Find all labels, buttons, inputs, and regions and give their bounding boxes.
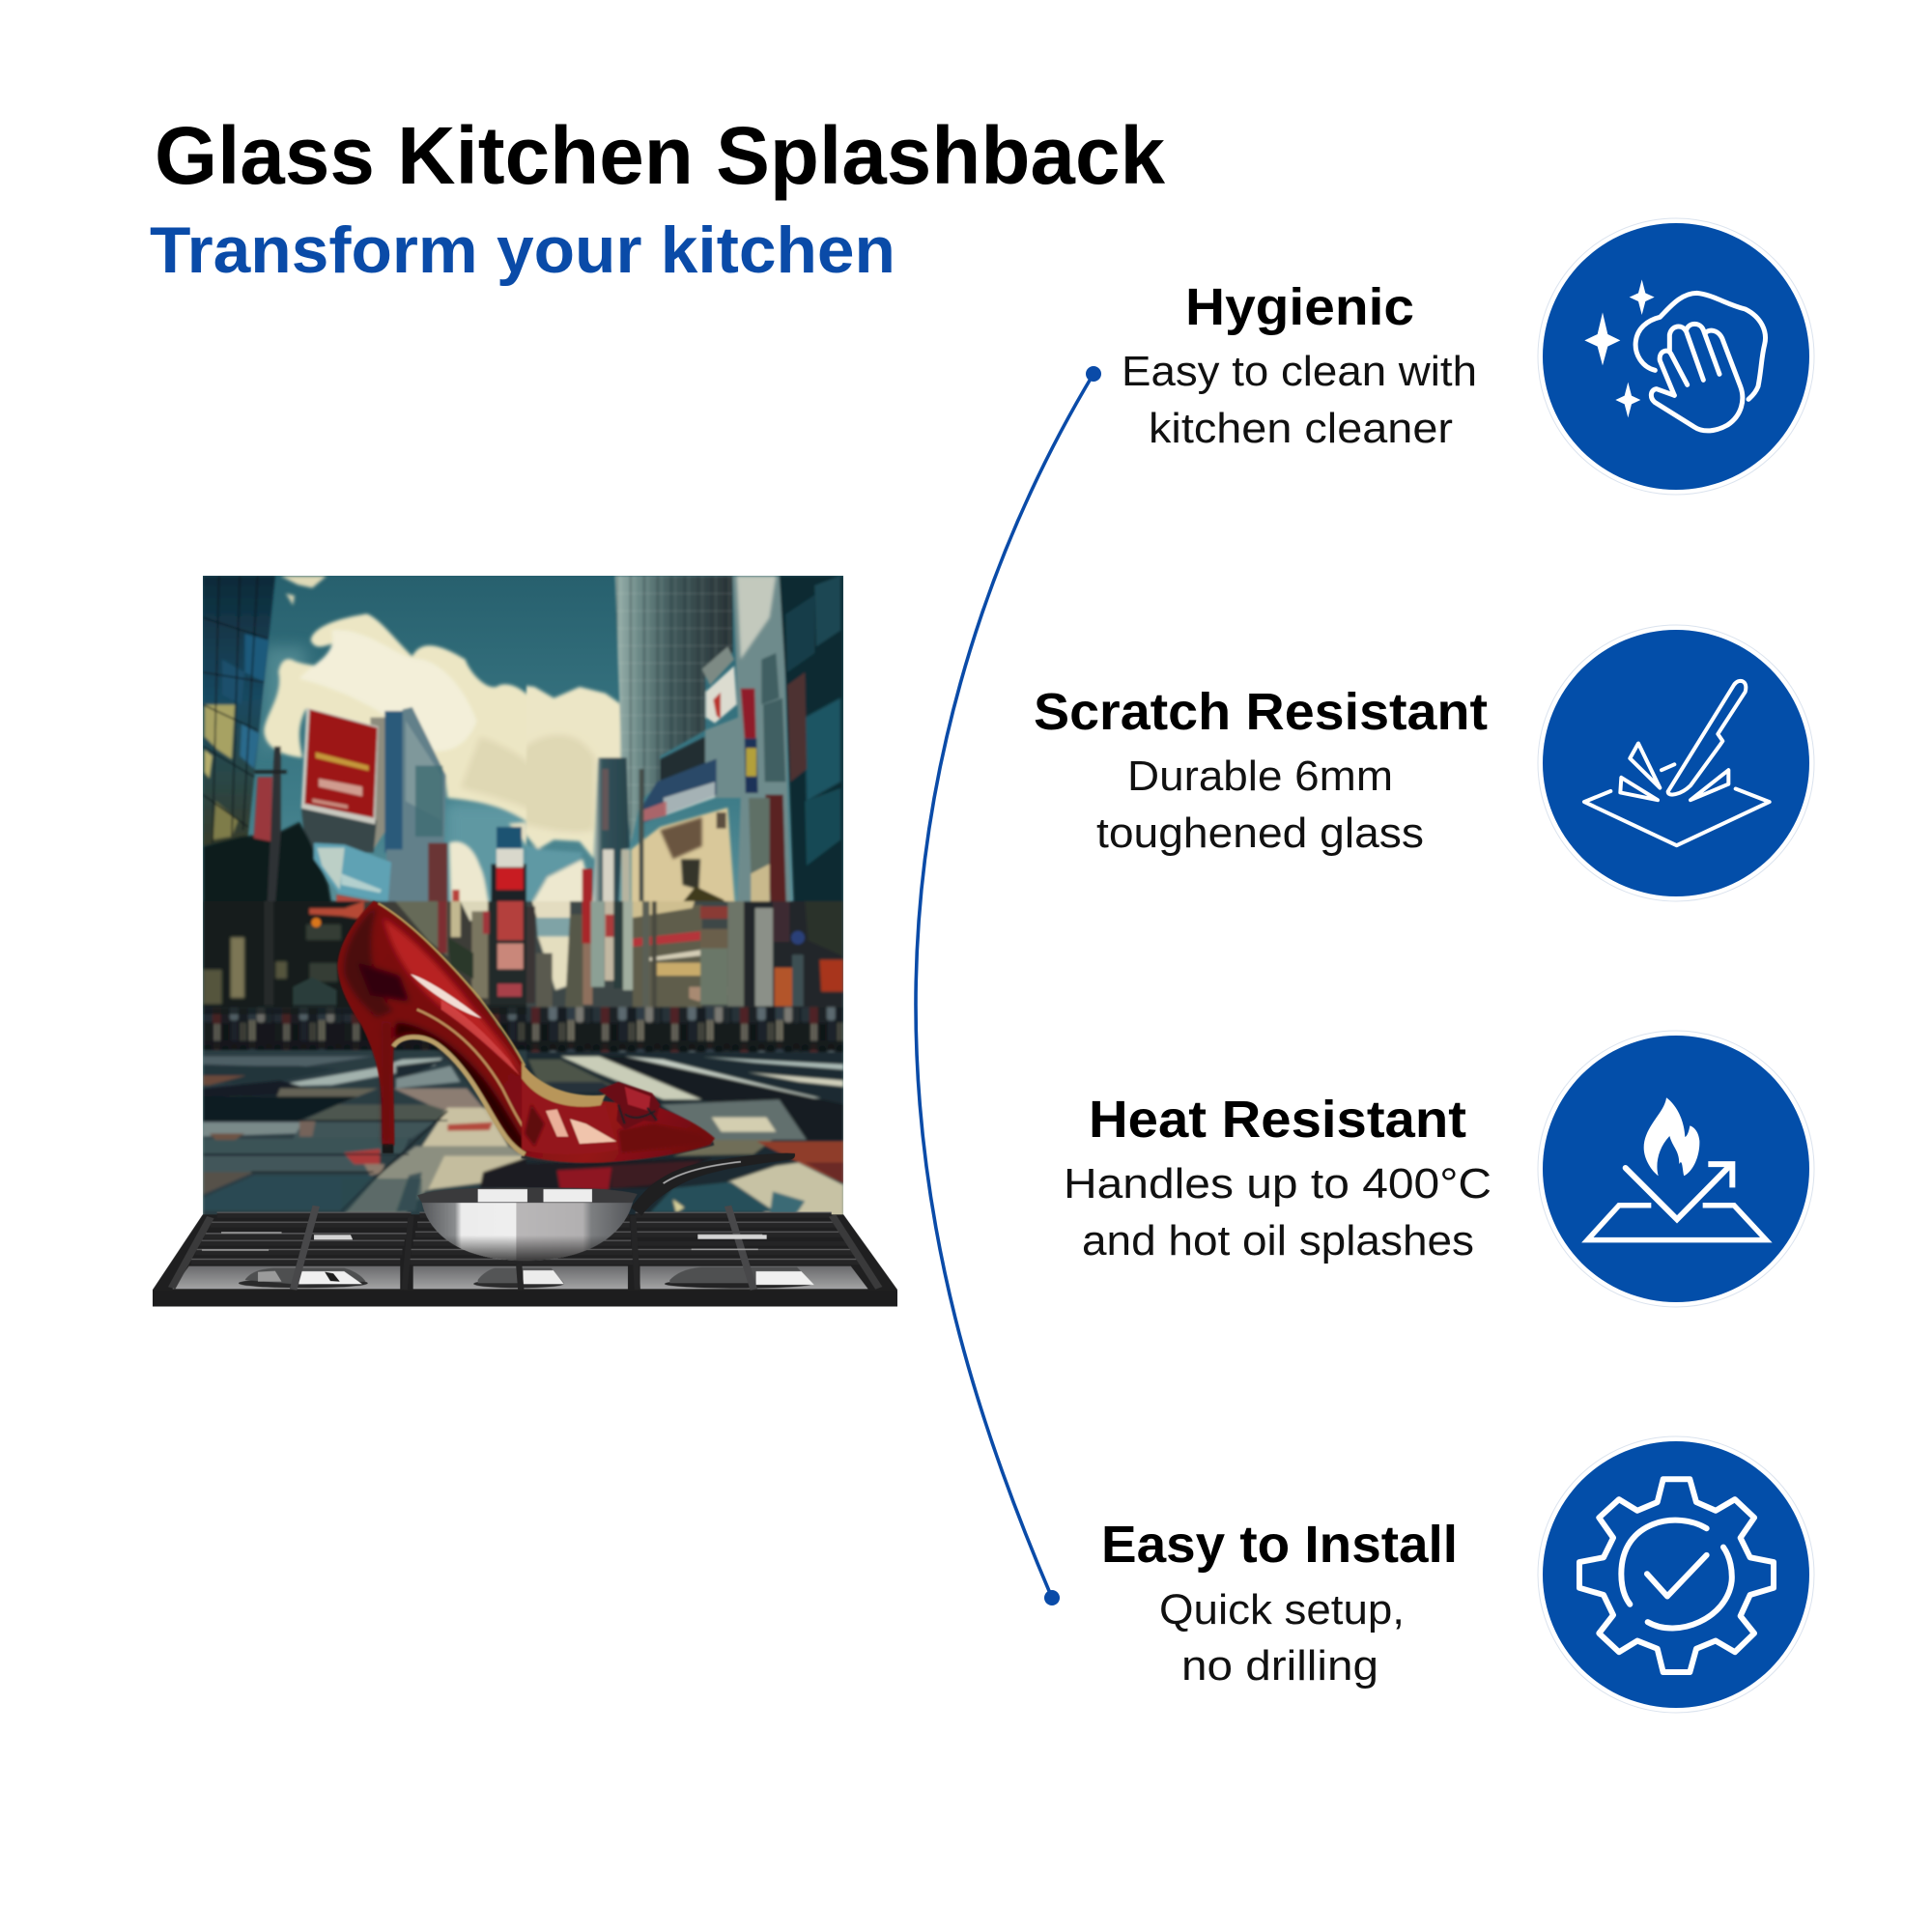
middle building xyxy=(593,757,630,904)
shoe gold lining xyxy=(379,903,525,1065)
pan handle xyxy=(631,1153,795,1215)
feature: Scratch Resistant: toughened glass xyxy=(1096,810,1424,857)
pan rim xyxy=(417,1187,638,1203)
glass tower xyxy=(615,576,732,843)
feature: Easy to Install xyxy=(1101,1516,1458,1690)
vertical signs xyxy=(741,689,756,738)
center billboards xyxy=(491,864,531,904)
light side building xyxy=(705,576,790,904)
icon: hand wiping with sparkles xyxy=(1538,218,1814,495)
shoe insole xyxy=(522,1063,606,1110)
billboard building xyxy=(370,718,388,849)
street pole and sign xyxy=(268,747,281,904)
front edge xyxy=(153,1292,897,1307)
pan body xyxy=(421,1197,634,1261)
feature: Heat Resistant: and hot oil splashes xyxy=(1082,1217,1474,1264)
burners xyxy=(239,1267,814,1289)
photo: upper-left quadrant, clouds, billboard, glass building xyxy=(203,576,531,904)
photo layers xyxy=(203,576,850,1231)
infographic canvas xyxy=(151,124,1814,1714)
hob trays xyxy=(173,1266,868,1289)
feature: Heat Resistant: Heat Resistant xyxy=(1089,1091,1466,1149)
photo: lower-right quadrant, shops, crowd and crossing xyxy=(522,898,850,1226)
shoe bow xyxy=(598,1082,660,1129)
pavement and crossing xyxy=(203,1050,531,1231)
shoe reflections and highlights xyxy=(344,903,529,1154)
feature: Scratch Resistant: Durable 6mm xyxy=(1127,753,1393,800)
connector bottom dot xyxy=(1044,1590,1060,1605)
icon: flame with deflecting arrow xyxy=(1538,1031,1814,1307)
large cream poster xyxy=(631,808,735,904)
red painted crossing xyxy=(756,1142,843,1183)
feature: Easy to Install: Quick setup, xyxy=(1159,1586,1405,1634)
street vista xyxy=(531,898,570,921)
feature: Scratch Resistant xyxy=(1034,683,1488,857)
feature: Scratch Resistant: Scratch Resistant xyxy=(1034,683,1488,741)
feature: Easy to Install: no drilling xyxy=(1181,1642,1378,1690)
feature: Hygienic: Easy to clean with xyxy=(1122,348,1477,395)
feature: Hygienic: Hygienic xyxy=(1185,278,1414,336)
feature: Heat Resistant: Handles up to 400°C xyxy=(1064,1160,1492,1208)
shoe vamp highlights xyxy=(522,1079,708,1154)
left glass building xyxy=(203,576,275,846)
white poster on tower xyxy=(702,646,734,685)
crossing xyxy=(522,1052,850,1226)
crowd left xyxy=(203,1008,531,1051)
icon: gear with check mark xyxy=(1538,1436,1814,1713)
red billboard xyxy=(301,805,377,853)
feature: Hygienic xyxy=(1122,278,1477,452)
photo sky background xyxy=(203,576,843,1227)
street-level shops xyxy=(633,905,702,1008)
icon: knife scratching glass xyxy=(1538,625,1814,901)
trees xyxy=(203,822,331,904)
lower pavement right xyxy=(526,1158,843,1215)
connector top dot xyxy=(1086,366,1101,382)
grate bars xyxy=(191,1212,862,1260)
title: Glass Kitchen Splashback xyxy=(155,110,1165,201)
dark right building xyxy=(780,576,843,904)
shoe heel tip xyxy=(383,1144,393,1153)
blue billboard xyxy=(314,843,391,902)
red stiletto shoe xyxy=(337,901,715,1163)
feature: Hygienic: kitchen cleaner xyxy=(1149,405,1453,452)
connector curve xyxy=(916,366,1101,1605)
stove and pan xyxy=(153,1153,897,1307)
photo: lower-left quadrant, street, crowd and pavement xyxy=(203,898,531,1231)
distant buildings behind shoe xyxy=(362,900,491,1007)
feature: Heat Resistant xyxy=(1064,1091,1492,1264)
crowd right xyxy=(522,1008,850,1053)
subtitle: Transform your kitchen xyxy=(150,213,895,287)
dark advert band xyxy=(660,737,705,785)
photo: upper-right quadrant, tower and buildings xyxy=(522,576,843,904)
feature: Easy to Install: Easy to Install xyxy=(1101,1516,1458,1574)
product image: splashback photo with stove and pan xyxy=(153,576,897,1307)
hob body xyxy=(153,1214,897,1307)
